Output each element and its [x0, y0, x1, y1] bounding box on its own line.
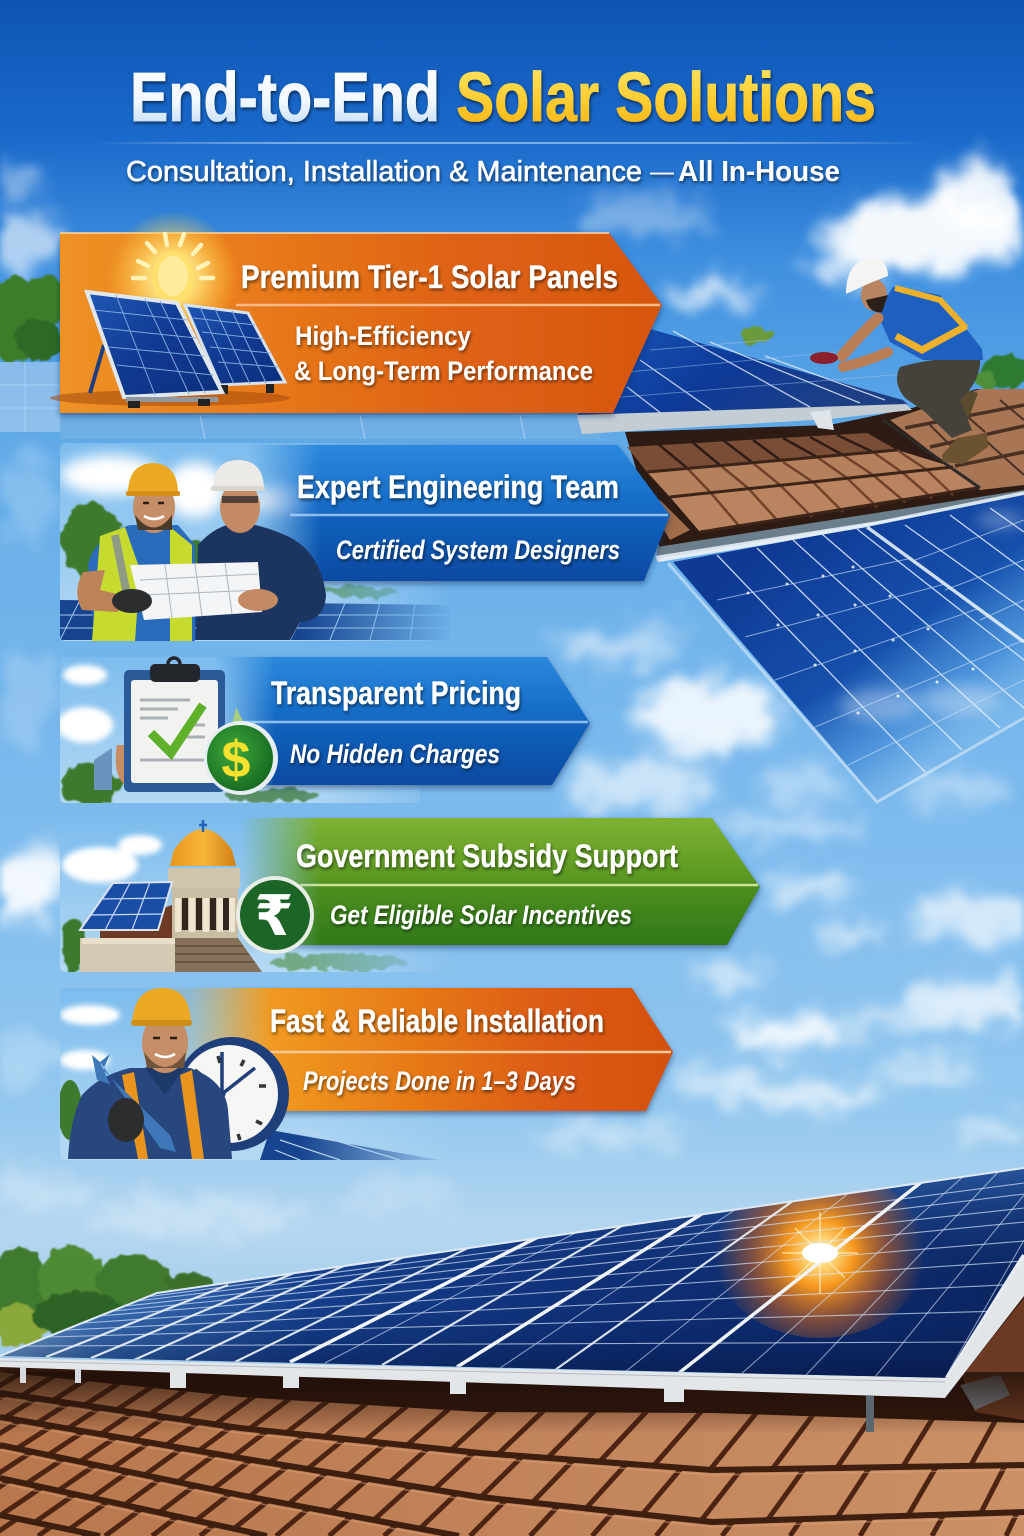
arrow banner	[200, 445, 670, 581]
photo backdrop	[60, 988, 438, 1160]
heading: Expert Engineering Team	[297, 469, 619, 505]
subtitle: Consultation, Installation & Maintenance	[126, 156, 642, 188]
right tiles beyond the rail	[890, 389, 1024, 490]
main title	[130, 58, 876, 136]
icon: clock	[175, 1037, 289, 1151]
description: Projects Done in 1–3 Days	[303, 1066, 576, 1096]
solar array	[0, 1168, 1024, 1432]
main title: Solar Solutions	[456, 58, 876, 136]
arrow banner	[190, 657, 590, 785]
faded panel strip behind first banner	[0, 362, 600, 439]
trees at left of array	[0, 1245, 214, 1347]
icon: sun	[107, 211, 239, 343]
rooftop scene with installer	[577, 258, 1024, 802]
photo backdrop	[60, 443, 444, 641]
panel: government subsidy support	[60, 818, 760, 973]
trees left of first banner	[0, 276, 67, 362]
description: No Hidden Charges	[290, 739, 500, 769]
brick roof	[0, 1296, 1024, 1536]
lower right roof and solar array	[0, 500, 1024, 1536]
engineer with shirt	[112, 460, 326, 640]
right side trees	[738, 327, 1024, 389]
installer worker	[810, 258, 988, 464]
photo: government building	[60, 820, 424, 972]
heading: Fast & Reliable Installation	[270, 1003, 604, 1039]
description: Certified System Designers	[336, 535, 620, 565]
icon: dollar coin	[204, 707, 278, 795]
heading: Government Subsidy Support	[296, 838, 678, 874]
clouds	[0, 160, 1024, 1235]
description: High-Efficiency	[295, 321, 471, 351]
two engineers	[77, 460, 326, 641]
row C	[670, 467, 977, 532]
heading: Premium Tier-1 Solar Panels	[241, 259, 618, 295]
subtitle: All In-House	[678, 156, 840, 188]
row A in shade	[627, 433, 897, 472]
arrow banner	[160, 988, 673, 1111]
description: & Long-Term Performance	[294, 356, 593, 386]
subtitle: —	[650, 156, 674, 188]
row B	[647, 450, 953, 497]
main title: End-to-End	[130, 58, 440, 136]
panel: expert engineering team	[60, 443, 670, 641]
arrow banner	[200, 818, 760, 945]
icon: dollar coin: $	[222, 731, 251, 789]
icon: solar panels	[50, 292, 290, 408]
panel: premium tier-1 solar panels	[50, 211, 662, 413]
upper solar panel	[577, 329, 912, 434]
worker with vest	[77, 463, 195, 641]
panel: transparent pricing	[57, 657, 590, 805]
tiled roof	[625, 389, 1024, 562]
icon: rupee coin: ₹	[255, 884, 293, 949]
icon: rupee coin	[236, 876, 314, 954]
panel: fast and reliable installation	[58, 988, 673, 1160]
heading: Transparent Pricing	[271, 675, 521, 711]
lower solar panel	[660, 493, 1024, 802]
worker with wrench	[68, 988, 232, 1159]
description	[294, 321, 593, 386]
description: Get Eligible Solar Incentives	[330, 900, 632, 930]
icon: clipboard with check	[116, 658, 225, 792]
photo backdrop	[57, 657, 420, 805]
